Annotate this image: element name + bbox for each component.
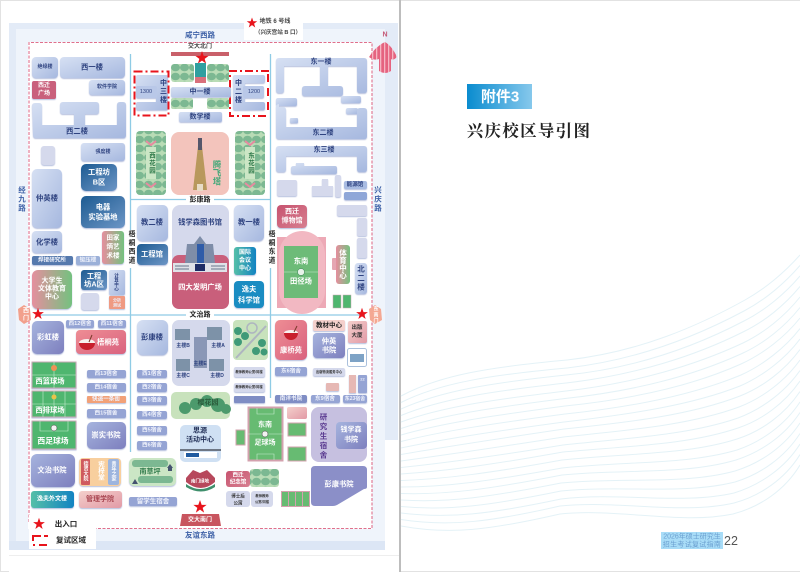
east gate: 东南门 bbox=[372, 305, 378, 324]
building: 管理学院 bbox=[79, 491, 122, 508]
legend: exam zone text: 复试区域 bbox=[56, 534, 86, 544]
small pink block bbox=[287, 407, 307, 419]
road label: 文治路 bbox=[186, 310, 214, 320]
building: 博士后公寓 bbox=[226, 491, 250, 507]
building: 中二楼 bbox=[233, 75, 265, 110]
building: 彭康楼: 彭康楼 bbox=[141, 332, 164, 342]
building: 宪梓堂: 德贤大院 bbox=[82, 460, 88, 482]
metro callout bbox=[244, 17, 303, 40]
building: 南草坪: 南草坪 bbox=[140, 466, 160, 476]
garden: 东花园 bbox=[235, 131, 265, 195]
dorm: 西15宿舍: 西15宿舍 bbox=[94, 408, 118, 416]
building: 田家炳艺术楼: 术楼 bbox=[106, 250, 120, 260]
building: 彭康书院: 彭康书院 bbox=[324, 480, 354, 488]
wave lines bbox=[401, 255, 800, 530]
garden: 西花园 bbox=[136, 131, 166, 195]
building: 宪梓堂 bbox=[79, 458, 121, 486]
dorm: 西6宿舍 bbox=[137, 440, 167, 450]
building: 教二楼: 教二楼 bbox=[141, 218, 164, 226]
building: 大学生文体教育中心: 文体教育 bbox=[38, 284, 66, 292]
building: 计算中心: 测试 bbox=[113, 302, 121, 308]
building: 逸夫科学馆: 逸夫 bbox=[242, 284, 257, 294]
green: 南门绿地: 南门绿地 bbox=[191, 478, 209, 484]
building: 管理学院: 管理学院 bbox=[86, 494, 114, 503]
dorm: 西2宿舍: 西2宿舍 bbox=[142, 382, 162, 390]
building: 焊接研究所: 焊接研究所 bbox=[38, 256, 66, 264]
building: 数学楼: 数学楼 bbox=[190, 112, 210, 120]
heading: 兴庆校区导引图: 兴庆校区导引图 bbox=[467, 120, 591, 140]
building: 钱学森书院: 书院 bbox=[344, 434, 358, 444]
road label: 彭康路 bbox=[186, 194, 214, 205]
dorm: 研究生宿舍 bbox=[311, 407, 367, 462]
canteen: 梧桐苑: 梧桐苑 bbox=[97, 338, 120, 346]
building: 仲英楼 bbox=[32, 169, 62, 228]
legend: exam zone swatch bbox=[33, 536, 48, 545]
library building bbox=[173, 236, 227, 272]
court: 西足球场 bbox=[32, 421, 76, 449]
trees: south-east bbox=[207, 98, 229, 109]
building: 西一楼 bbox=[60, 57, 125, 78]
monument: 腾飞塔: 腾飞塔 bbox=[212, 159, 222, 186]
building: 崇实书院: 崇实书院 bbox=[91, 430, 121, 440]
metro callout: （兴庆宫站 B 口） bbox=[255, 28, 301, 36]
monument: 腾飞塔 bbox=[171, 132, 229, 195]
panel: right page bbox=[401, 84, 800, 549]
west blocks bbox=[32, 57, 126, 310]
small dorm rows bbox=[234, 366, 367, 403]
building: 东二楼: 东二楼 bbox=[312, 128, 334, 136]
building: 西一楼: 西一楼 bbox=[81, 62, 104, 72]
dorm: 西14宿舍: 西14宿舍 bbox=[94, 382, 118, 390]
block: 教师周转公寓 A: 教师教师公寓/同楼 bbox=[235, 369, 263, 374]
legend: entrance star bbox=[33, 518, 45, 529]
building: 逸夫科学馆: 科学馆 bbox=[238, 296, 260, 304]
north gate bbox=[171, 42, 229, 64]
road label: 经九路: 经九路 bbox=[17, 185, 26, 213]
green: 南门绿地 bbox=[186, 470, 215, 492]
footer tag: 2026年硕士研究生 bbox=[663, 532, 721, 540]
building: 西迁广场 bbox=[32, 81, 56, 99]
plaza: 四大发明广场: 四大发明广场 bbox=[178, 282, 222, 292]
building: 西迁广场: 广场 bbox=[38, 89, 50, 97]
court: 东南足球场: 足球场 bbox=[254, 438, 276, 446]
courts: four bbox=[282, 492, 310, 506]
building: 思源活动中心: 思源 bbox=[193, 426, 207, 434]
building: 化学楼: 化学楼 bbox=[36, 238, 59, 246]
building: 仲英书院: 仲英 bbox=[322, 336, 337, 346]
building: 工程馆: 工程馆 bbox=[141, 250, 163, 258]
garden: 樱花园 bbox=[171, 392, 231, 419]
building: 电器实验基地: 实验基地 bbox=[88, 212, 118, 222]
building: 宪梓堂: 宪梓堂 bbox=[96, 460, 105, 481]
dorm: 西15宿舍 bbox=[87, 408, 126, 418]
stadium: 东南田径场: 东南 bbox=[294, 256, 308, 266]
dorm: 西12宿舍 bbox=[66, 319, 94, 328]
road label: 咸宁西路: 咸宁西路 bbox=[185, 30, 215, 40]
dorm: 西13宿舍 bbox=[87, 369, 126, 378]
park bbox=[233, 320, 268, 360]
building: 计算中心 bbox=[109, 270, 125, 309]
building: 工程坊A区: 坊A区 bbox=[84, 280, 104, 288]
building: 大学生文体教育中心: 大学生 bbox=[42, 276, 62, 284]
library: 钱学森图书馆 bbox=[172, 205, 229, 309]
building: 工程坊A区: 工程 bbox=[87, 272, 102, 280]
building: 电器实验基地 bbox=[81, 196, 125, 228]
building: 思源活动中心 bbox=[180, 425, 221, 462]
building: 北二楼: 北二楼 bbox=[356, 264, 366, 292]
building: 东二楼 bbox=[276, 104, 367, 139]
central teal building bbox=[195, 63, 206, 83]
trees: north-west bbox=[171, 64, 194, 82]
dorm: 西1宿舍 bbox=[137, 369, 167, 378]
dorm: 东22宿舍: 22 bbox=[360, 376, 365, 382]
library: 钱学森图书馆: 钱学森图书馆 bbox=[178, 218, 222, 226]
building: 西二楼: 西二楼 bbox=[66, 126, 89, 136]
street: 快递一条街 bbox=[87, 394, 126, 403]
badge: 附件3: 附件3 bbox=[481, 88, 519, 106]
building: 计算中心: 计算中心 bbox=[114, 272, 120, 291]
dorm: 西4宿舍 bbox=[137, 410, 167, 419]
trees: memorial bbox=[250, 469, 279, 487]
building: 工程坊A区 bbox=[81, 270, 107, 290]
dorm: 西5宿舍: 西5宿舍 bbox=[142, 426, 162, 434]
building: 绝缘楼 bbox=[32, 57, 58, 78]
building: 国际会议中心: 国际 bbox=[239, 248, 251, 256]
dorm: 东23宿舍: 东23宿舍 bbox=[345, 395, 365, 402]
building: 中三楼: 1300 bbox=[140, 89, 152, 95]
building: 能源馆 bbox=[344, 180, 367, 200]
building: 逸夫科学馆 bbox=[234, 281, 264, 308]
road label: 彭康路: 彭康路 bbox=[190, 194, 210, 204]
court: 西排球场: 西排球场 bbox=[35, 406, 65, 414]
dorm: 东9宿舍: 东9宿舍 bbox=[315, 394, 335, 402]
building: 锻压楼: 锻压楼 bbox=[80, 256, 97, 264]
building: 教材中心: 教材中心 bbox=[316, 320, 342, 329]
block: 教师周转公寓 B: 教师教师公寓/同楼 bbox=[235, 384, 263, 389]
building: 国际会议中心: 中心 bbox=[239, 264, 251, 272]
teaching blocks bbox=[137, 205, 264, 308]
building: 西迁博物馆 bbox=[277, 205, 307, 228]
dorm: 西11宿舍: 西11宿舍 bbox=[101, 319, 124, 327]
road label: 梧桐西道 bbox=[126, 229, 135, 268]
sports: 体育中心: 体育中心 bbox=[338, 248, 348, 279]
icon: north arrow: N bbox=[382, 32, 388, 38]
wing blocks bbox=[276, 96, 361, 123]
building: 工程坊B区 bbox=[81, 164, 117, 191]
east blocks bbox=[276, 56, 367, 294]
court: 西篮球场: 西篮球场 bbox=[35, 376, 65, 386]
dorm: 西1宿舍: 西1宿舍 bbox=[142, 369, 162, 377]
building: 教师公寓 bbox=[251, 491, 273, 507]
badge: 附件3 bbox=[467, 84, 532, 109]
building: small block bbox=[81, 293, 99, 310]
building: 出版大厦: 大厦 bbox=[351, 331, 363, 339]
building: 逸夫外文楼 bbox=[31, 491, 74, 508]
building: 仲英楼: 仲英楼 bbox=[36, 194, 59, 202]
exam zone: west bbox=[134, 72, 168, 116]
court: 西篮球场 bbox=[32, 362, 76, 388]
building: 彭康楼 bbox=[137, 320, 168, 355]
court: 西排球场 bbox=[32, 391, 76, 417]
building: 东一楼 bbox=[276, 56, 367, 96]
building: 软件学院: 软件学院 bbox=[97, 83, 117, 90]
street: 快递一条街: 快递一条街 bbox=[92, 394, 120, 402]
dorm: 西3宿舍 bbox=[137, 396, 167, 405]
dorm: 西12宿舍: 西12宿舍 bbox=[68, 319, 92, 327]
building: 西迁博物馆: 博物馆 bbox=[282, 216, 302, 224]
garden: 东花园: 东花园 bbox=[246, 151, 255, 174]
legend bbox=[29, 515, 96, 549]
building: 中三楼 bbox=[136, 75, 168, 110]
building: 仲英书院: 书院 bbox=[322, 346, 337, 354]
west gate: 西门 bbox=[22, 307, 28, 322]
building: 出版大厦: 出版 bbox=[351, 323, 363, 331]
building: 东三楼: 东三楼 bbox=[314, 144, 334, 154]
building: 钱学森书院 bbox=[336, 422, 367, 449]
building: 化学楼 bbox=[32, 231, 62, 253]
trees: north-east bbox=[207, 64, 229, 82]
building: 电器实验基地: 电器 bbox=[96, 202, 111, 212]
dorm: 西6宿舍: 西6宿舍 bbox=[142, 440, 162, 448]
court: 东南足球场: 东南 bbox=[258, 420, 272, 428]
dorm: 研究生宿舍: 研究生宿舍 bbox=[319, 413, 328, 460]
building: 中一楼: 中一楼 bbox=[190, 86, 210, 96]
building: 博士后公寓: 博士后 bbox=[231, 492, 245, 500]
east gate bbox=[356, 305, 382, 324]
building: 西迁广场: 西迁 bbox=[38, 81, 50, 89]
south gate bbox=[180, 500, 221, 526]
building: 国际会议中心: 会议 bbox=[239, 256, 251, 264]
north court bbox=[171, 63, 231, 122]
framed block bbox=[348, 348, 366, 366]
road label: 文治路: 文治路 bbox=[190, 310, 210, 318]
west gate bbox=[18, 305, 44, 324]
building: 逸夫外文楼: 逸夫外文楼 bbox=[37, 494, 67, 502]
canteen: 康桥苑 bbox=[275, 320, 307, 360]
dorm: 西14宿舍 bbox=[87, 382, 126, 392]
building: 彭康书院 bbox=[311, 466, 367, 506]
stadium: 东南田径场: 田径场 bbox=[290, 276, 312, 286]
building: 西迁纪念馆: 纪念馆 bbox=[230, 478, 247, 486]
building: 博士后公寓: 公寓 bbox=[234, 500, 243, 506]
sports: 体育中心 bbox=[332, 245, 350, 284]
sports: small courts bbox=[333, 295, 351, 308]
building: 文治书院 bbox=[31, 454, 75, 487]
bar block bbox=[234, 396, 265, 403]
building: 软件学院 bbox=[89, 80, 125, 95]
building: 西二楼 bbox=[32, 102, 126, 138]
building: 宪梓堂: 青年之家 bbox=[110, 460, 116, 482]
road label: 兴庆路: 兴庆路 bbox=[373, 185, 382, 213]
building: 思源活动中心: 活动中心 bbox=[186, 434, 214, 444]
legend: entrance text: 出入口 bbox=[55, 518, 77, 528]
road label: 梧桐东道: 梧桐东道 bbox=[267, 229, 275, 265]
dorm: 西4宿舍: 西4宿舍 bbox=[142, 410, 162, 418]
south-west blocks bbox=[31, 319, 177, 508]
building: 北二楼 bbox=[355, 263, 367, 294]
main building complex: 主楼E bbox=[193, 360, 207, 367]
north gate: 交大北门 bbox=[188, 42, 212, 50]
court: 西足球场: 西足球场 bbox=[37, 436, 69, 446]
building: 文治书院: 文治书院 bbox=[37, 466, 67, 474]
dashed exam boundary bbox=[134, 72, 168, 116]
canteen: 康桥苑: 康桥苑 bbox=[280, 346, 303, 354]
dorm: 西2宿舍 bbox=[137, 382, 167, 392]
building: 中二楼: 1200 bbox=[248, 89, 260, 95]
roads bbox=[38, 54, 365, 452]
main building complex: 主楼A bbox=[211, 342, 225, 349]
building: 田家炳艺术楼: 炳艺 bbox=[106, 242, 120, 250]
court: 东南足球场 bbox=[248, 408, 283, 460]
building: 西迁博物馆: 西迁 bbox=[285, 206, 299, 216]
building: 工程坊B区: 工程坊 bbox=[88, 168, 111, 176]
main building complex bbox=[172, 320, 230, 386]
building: 教师公寓: 公寓/同楼 bbox=[255, 499, 270, 504]
building: 出版大厦 bbox=[348, 321, 367, 343]
light blocks bbox=[277, 175, 367, 258]
dashed exam boundary bbox=[230, 71, 269, 116]
building: 仲英书院 bbox=[313, 333, 345, 358]
building: 钱学森书院: 钱学森 bbox=[340, 424, 362, 434]
dorm: 西11宿舍 bbox=[98, 319, 126, 328]
canteen: 梧桐苑 bbox=[76, 330, 126, 354]
building: 工程坊B区: B区 bbox=[93, 178, 105, 186]
building: 教师公寓: 教师教师 bbox=[255, 493, 269, 498]
dorm: 西3宿舍: 西3宿舍 bbox=[142, 396, 162, 404]
road label: 梧桐西道: 梧桐西道 bbox=[127, 229, 135, 265]
building: 教材中心 bbox=[313, 320, 345, 331]
building: 西迁纪念馆: 西迁 bbox=[232, 470, 244, 478]
building: 大学生文体教育中心 bbox=[32, 270, 72, 309]
trees: south-west bbox=[171, 98, 193, 109]
building: 焊接研究所 bbox=[32, 256, 73, 265]
building: 彩虹楼 bbox=[32, 321, 64, 354]
main building complex: 主楼D bbox=[210, 372, 224, 379]
building: 西迁纪念馆 bbox=[226, 470, 250, 487]
building: 计算中心: 分析 bbox=[113, 296, 121, 302]
building: 大学生文体教育中心: 中心 bbox=[45, 292, 59, 300]
dorm: 东6宿舍: 东6宿舍 bbox=[281, 366, 301, 374]
campus boundary bbox=[29, 42, 372, 528]
footer tag: 招生考试复试指南 bbox=[663, 540, 721, 548]
icon: north arrow bbox=[369, 32, 397, 73]
courts: small bbox=[236, 423, 306, 461]
garden: 西花园: 西花园 bbox=[148, 152, 156, 174]
dorm: 西13宿舍: 西13宿舍 bbox=[94, 369, 118, 377]
building: 田家炳艺术楼: 田家 bbox=[106, 232, 120, 242]
page number: 22 bbox=[724, 534, 738, 548]
building: 强度楼 bbox=[81, 143, 125, 161]
building: 国际会议中心 bbox=[234, 247, 256, 275]
exam zone: east bbox=[230, 71, 269, 116]
main building complex: 主楼C bbox=[176, 372, 190, 379]
dorm: 西5宿舍 bbox=[137, 426, 167, 435]
dorm: 南洋书院: 南洋书院 bbox=[280, 394, 303, 402]
building: 南草坪 bbox=[129, 458, 176, 486]
dorm: 留学生宿舍 bbox=[129, 496, 177, 506]
road label: 梧桐东道 bbox=[266, 229, 275, 268]
map background bbox=[9, 23, 399, 572]
garden: 樱花园: 樱花园 bbox=[198, 398, 218, 406]
building: 崇实书院 bbox=[87, 422, 126, 449]
building: 东一楼: 东一楼 bbox=[310, 56, 332, 66]
building: 田家炳艺术楼 bbox=[102, 231, 124, 264]
metro callout: 地铁 6 号线 bbox=[260, 17, 290, 25]
south gate: 交大南门 bbox=[188, 516, 212, 524]
panel: campus map bbox=[9, 17, 399, 572]
building: 教一楼: 教一楼 bbox=[238, 218, 261, 226]
building: 东三楼 bbox=[276, 144, 367, 174]
road label: 友谊东路: 友谊东路 bbox=[185, 530, 215, 540]
building: small block bbox=[41, 146, 55, 165]
stadium: 东南田径场 bbox=[277, 231, 326, 314]
block: 服务中心: 出版物流服务中心 bbox=[316, 369, 343, 374]
building: 锻压楼 bbox=[76, 256, 100, 265]
small pink block bbox=[326, 383, 339, 391]
building: 彩虹楼: 彩虹楼 bbox=[37, 332, 60, 342]
building: 绝缘楼: 绝缘楼 bbox=[37, 63, 53, 70]
building: 中二楼: 中二楼 bbox=[234, 78, 242, 104]
building: 能源馆: 能源馆 bbox=[347, 180, 364, 188]
footer tag bbox=[661, 532, 723, 549]
main building complex: 主楼B bbox=[176, 342, 190, 349]
building: 强度楼: 强度楼 bbox=[95, 148, 111, 155]
building: 中三楼: 中三楼 bbox=[160, 78, 167, 104]
dorm: 留学生宿舍: 留学生宿舍 bbox=[137, 496, 170, 505]
